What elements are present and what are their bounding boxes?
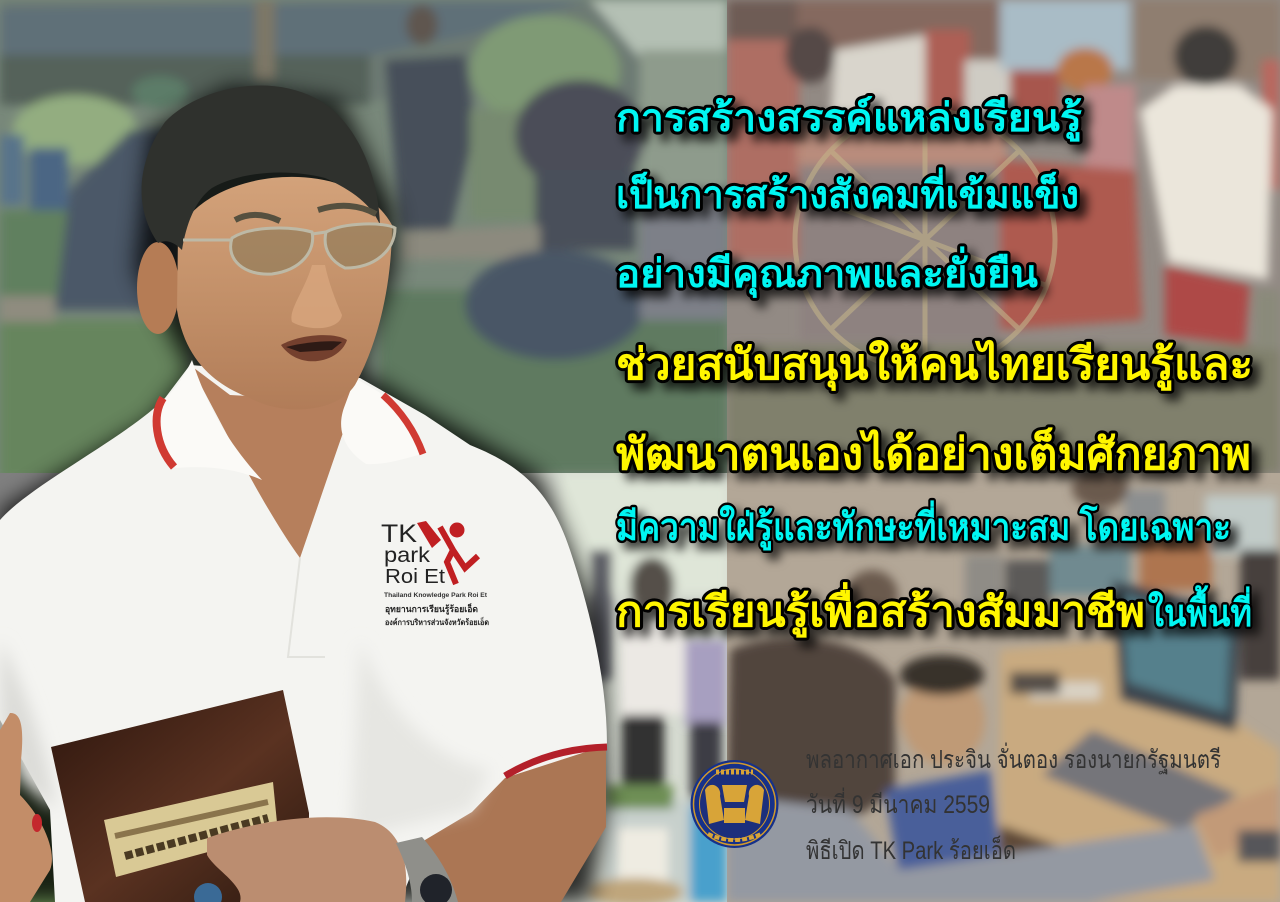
- watch: [396, 837, 458, 902]
- caption: event: พิธีเปิด TK Park ร้อยเอ็ด: [806, 835, 1016, 865]
- shirt: [0, 365, 607, 902]
- headline line 2: เป็นการสร้างสังคมที่เข้มแข็ง: [616, 167, 1079, 217]
- shirt logo: TK park Roi Et: อุทยานการเรียนรู้ร้อยเอ็ด: [385, 602, 478, 615]
- nose: [291, 265, 342, 328]
- headline line 1: การสร้างสรรค์แหล่งเรียนรู้: [616, 95, 1082, 142]
- right hand: [207, 817, 406, 902]
- plaque gold plate: [104, 782, 278, 877]
- shirt logo: TK park Roi Et: Roi Et: [385, 566, 445, 588]
- face: [177, 177, 392, 409]
- photo: garden visit background: [0, 0, 727, 480]
- shirt placket: [288, 558, 325, 657]
- shirt logo: TK park Roi Et: park: [384, 544, 431, 567]
- eyeglasses: [183, 224, 395, 274]
- person shadow glow: [0, 85, 608, 902]
- head: [137, 86, 395, 409]
- photo: classroom children background: [0, 473, 727, 902]
- collar left: [153, 360, 262, 480]
- icon: government seal: [690, 760, 778, 848]
- photo: computer room background: [727, 468, 1280, 902]
- eyebrows: [235, 206, 376, 221]
- mouth: [281, 335, 347, 361]
- shirt logo: TK park Roi Et: TK: [381, 520, 417, 548]
- collar right: [341, 378, 425, 464]
- headline line 7 cyan: ในพื้นที่: [1148, 585, 1252, 635]
- left hand: [0, 713, 52, 902]
- headline line 3: อย่างมีคุณภาพและยั่งยืน: [616, 246, 1038, 298]
- collar left red trim: [157, 398, 174, 467]
- caption text block: [806, 742, 1221, 865]
- person: portrait of speaker: [0, 85, 608, 902]
- shirt logo: TK park Roi Et: [381, 520, 489, 627]
- sleeve red cuff: [505, 747, 607, 776]
- arm with hand: [420, 742, 606, 902]
- shirt logo: TK park Roi Et: Thailand Knowledge Park Roi Et: [384, 592, 488, 599]
- headline line 5: พัฒนาตนเองได้อย่างเต็มศักยภาพ: [616, 427, 1251, 479]
- hair: [142, 86, 380, 250]
- shirt logo: TK park Roi Et: องค์การบริหารส่วนจังหวัดร้อยเอ็ด: [385, 616, 489, 627]
- ear: [137, 242, 179, 334]
- neck and open collar: [190, 365, 360, 558]
- photo: red shirts group background: [727, 0, 1280, 473]
- headline text block: [616, 95, 1253, 638]
- caption: date: วันที่ 9 มีนาคม 2559: [806, 787, 990, 819]
- icon: running figure: [417, 521, 478, 584]
- collar right red trim: [383, 395, 423, 454]
- plaque: [51, 690, 309, 902]
- headline line 7 yellow: การเรียนรู้เพื่อสร้างสัมมาชีพ: [616, 582, 1145, 638]
- headline line 4: ช่วยสนับสนุนให้คนไทยเรียนรู้และ: [616, 339, 1253, 392]
